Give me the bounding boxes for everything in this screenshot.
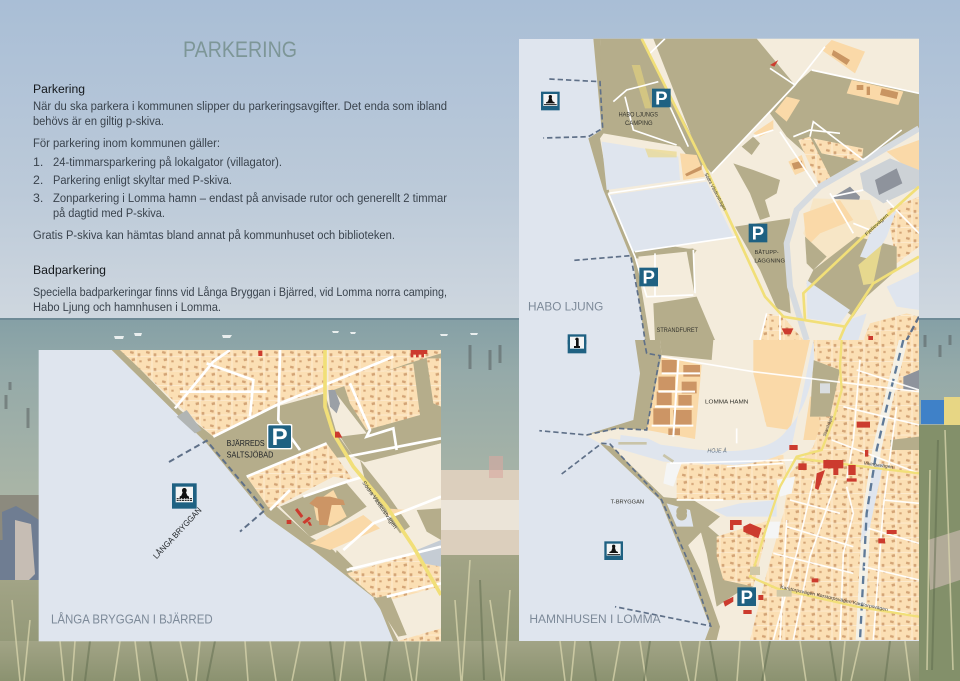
map title: LÅNGA BRYGGAN I BJÄRRED [51,612,213,627]
dashed bathing area lines [543,79,645,340]
road label: Karstorpsvägen: Karstorpsvägen Karstorpsvägen Karstorpsvägen [780,584,889,612]
panel: map of Långa Bryggan i Bjärred [39,350,441,641]
label: Höje Å: HÖJE Å [707,448,727,455]
label: Lomma Hamn: LOMMA HAMN [705,399,748,405]
icon: parking sign: P [740,586,753,607]
text block: badparkering [33,263,447,314]
text block: badparkering: Badparkering [33,263,106,277]
label: Båtuppläggning: LÄGGNING [754,257,785,264]
text block: parkering: Parkering enligt skyltar med P-skiva. [53,173,232,187]
label: Långa Bryggan: LÅNGA BRYGGAN [151,505,204,561]
dashed bathing area lines [539,340,711,626]
text block: badparkering: Habo Ljung och hamnhusen i Lomma. [33,300,221,314]
label: Habo Ljungs Camping [619,113,658,127]
icon: parking sign [639,267,658,288]
map section: Lomma south [529,340,919,640]
text block: parkering: Zonparkering i Lomma hamn – endast på anvisade rutor och generellt 2 timmar [53,191,447,205]
map section: Habo Ljung north [528,39,919,344]
road label: Fjelievägen: Fjelievägen [864,212,890,237]
icon: parking sign [652,88,671,109]
road label: Strandvägen: Strandvägen [822,415,834,437]
icon: bathing sign [541,92,560,110]
label: Habo Ljungs Camping: HABO LJUNGS [619,113,658,119]
icon: parking sign [749,223,767,244]
panel: map of Habo Ljung and Lomma [519,39,919,641]
icon: parking sign: P [655,88,668,109]
text block: parkering: 3. [33,191,43,205]
text block: parkering [33,82,447,242]
map title: Habo Ljung: HABO LJUNG [528,300,603,314]
icon: bathing sign [568,334,586,344]
road label: Södra Västkustvägen: Södra Västkustvägen [703,172,728,212]
text block: parkering: 1. [33,155,43,169]
text block: parkering: För parkering inom kommunen gäller: [33,136,220,150]
text block: parkering: När du ska parkera i kommunen slipper du parkeringsavgifter. Det enda som ibland [33,99,447,113]
text block: parkering: behövs är en giltig p-skiva. [33,114,164,128]
map title: Hamnhusen i Lomma: HAMNHUSEN I LOMMA [529,612,661,626]
text block: badparkering: Speciella badparkeringar finns vid Långa Bryggan i Bjärred, vid Lomma norra camping, [33,285,447,299]
label: Strandfuret: STRANDFURET [657,328,698,334]
label: Bjärreds Saltsjöbad: SALTSJÖBAD [227,450,274,459]
text block: parkering: Gratis P-skiva kan hämtas bland annat på kommunhuset och biblioteken. [33,228,395,242]
text block: parkering: Parkering [33,82,85,96]
icon: bathing sign [172,483,197,509]
dashed bathing area lines [169,441,265,532]
label: Bjärreds Saltsjöbad: BJÄRREDS [227,439,265,448]
title: PARKERING [183,37,297,62]
road label: Södra Västkustvägen: Södra Västkustvägen [360,480,398,530]
icon: bathing sign [604,541,623,560]
text block: parkering: 2. [33,173,43,187]
label: T-bryggan: T-BRYGGAN [611,499,644,505]
label: Bjärreds Saltsjöbad [227,439,274,459]
icon: parking sign [267,424,292,451]
text block: parkering: på dagtid med P-skiva. [53,206,165,220]
label: Båtuppläggning: BÅTUPP- [755,249,779,256]
road label: Vikingavägen: Vikingavägen [863,460,894,470]
label: Habo Ljungs Camping: CAMPING [625,121,653,127]
icon: parking sign: P [642,267,655,288]
icon: parking sign: P [272,424,288,451]
text block: parkering: 24-timmarsparkering på lokalgator (villagator). [53,155,282,169]
label: Båtuppläggning [754,249,785,264]
icon: parking sign: P [752,223,764,244]
icon: bathing sign [568,340,586,353]
icon: parking sign [737,586,756,607]
